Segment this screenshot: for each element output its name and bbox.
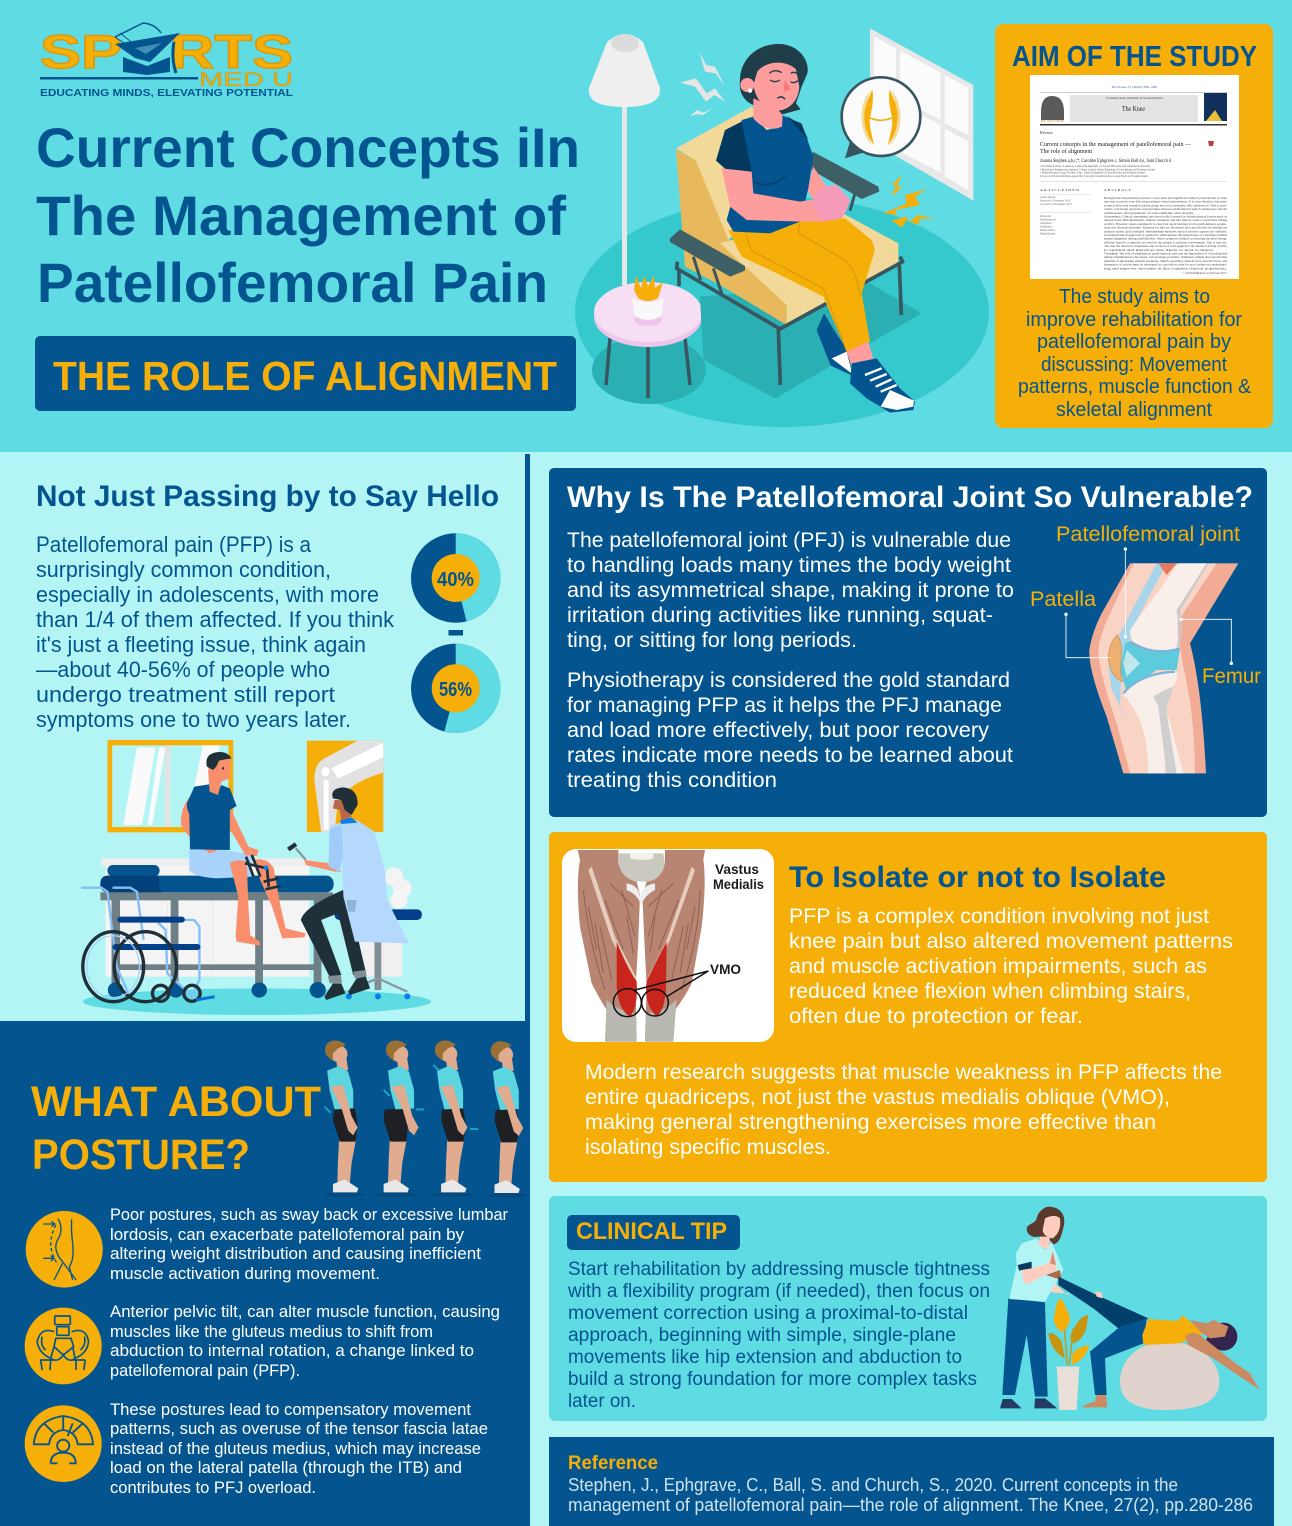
labels: Medialis bbox=[713, 876, 764, 892]
panel: what about posture bbox=[0, 1021, 530, 1526]
paragraph bbox=[36, 532, 395, 732]
paragraph: complex condition: knee pain but also altered movement patterns bbox=[789, 930, 1233, 953]
paper thumbnail: The Knee bbox=[1122, 105, 1145, 113]
paper thumbnail: altered lower limb kinematics, muscle weakness and late muscle onset or activation during bbox=[1104, 218, 1228, 222]
labels: Patella bbox=[1030, 588, 1096, 611]
panel: why is the joint so vulnerable bbox=[549, 468, 1267, 817]
text: compensatory patterns: patterns, such as overuse of the tensor fascia latae bbox=[110, 1420, 488, 1438]
panel: to isolate or not to isolate bbox=[549, 832, 1267, 1182]
chart: 56% donut bbox=[411, 644, 501, 733]
paragraph: Start rehabilitation by addressing muscle tightness bbox=[568, 1259, 990, 1280]
paragraph: build a strong foundation for more complex tasks bbox=[568, 1369, 977, 1390]
paper thumbnail: Accepted 13 November 2019 bbox=[1040, 203, 1072, 206]
paragraph: movements like hip extension and abduction to bbox=[568, 1347, 962, 1368]
paragraph: modern research: Modern research suggests that muscle weakness in PFP affects the bbox=[585, 1061, 1222, 1084]
paragraph: physiotherapy: treating this condition bbox=[567, 769, 777, 792]
paper thumbnail: activity. However when examined it is clear that study findings from patellofemoral popula- bbox=[1104, 222, 1227, 226]
paper thumbnail: Joanna Stephen a,b,c,*, Caroline Ephgrave c, Simon Ball d,e, Sam Church d bbox=[1040, 158, 1171, 164]
icon: knee joint speech bubble bbox=[842, 77, 920, 158]
title: The Management of bbox=[36, 184, 566, 247]
logo: Sports Med U: EDUCATING MINDS, ELEVATING POTENTIAL bbox=[40, 88, 293, 99]
paper thumbnail: Review bbox=[1040, 130, 1054, 135]
paragraph: complex condition: reduced knee flexion when climbing stairs, bbox=[789, 980, 1191, 1003]
paragraph: physiotherapy: Physiotherapy is considered the gold standard bbox=[567, 669, 1010, 692]
paper thumbnail: patient alignment during rehabilitation, where optimal is defined as ensuring the most energy bbox=[1104, 237, 1228, 241]
doctor bbox=[287, 787, 409, 1000]
illustration: four standing postures bbox=[324, 1041, 527, 1198]
paper thumbnail: © 2019 Published by Elsevier B.V. bbox=[1182, 271, 1228, 275]
label badge: CLINICAL TIP bbox=[576, 1218, 727, 1245]
paragraph: vulnerability: ting, or sitting for long periods. bbox=[567, 629, 857, 652]
heading: WHAT ABOUT bbox=[31, 1078, 321, 1126]
icon: floor lamp bbox=[589, 34, 660, 285]
text: anterior pelvic tilt: abduction to internal rotation, a change linked to bbox=[110, 1342, 474, 1360]
text: compensatory patterns bbox=[110, 1401, 488, 1497]
text: sway back: Poor postures, such as sway back or excessive lumbar bbox=[110, 1206, 509, 1224]
chair shadow bbox=[700, 283, 922, 398]
paper thumbnail: A biomechanical approach is applied to demonstrate the importance of ensuring optimal bbox=[1104, 233, 1227, 237]
aim text: patterns, muscle function & bbox=[1018, 376, 1252, 398]
paper thumbnail: ofar that the direction, magnitude and location of load applied to the skeleton during activity bbox=[1104, 244, 1228, 248]
heading bbox=[31, 1078, 321, 1179]
illustration: doctor examining patient's knee bbox=[81, 740, 431, 1015]
paper thumbnail: A B S T R A C T bbox=[1104, 188, 1131, 192]
illustration: therapist stretching patient on a ball bbox=[1000, 1207, 1262, 1410]
paragraph: modern research bbox=[585, 1061, 1222, 1159]
logo: Sports Med U: MED U bbox=[199, 70, 293, 91]
paragraph: physiotherapy: and load more effectively, but poor recovery bbox=[567, 719, 990, 742]
paragraph: physiotherapy bbox=[567, 669, 1013, 792]
patient bbox=[181, 752, 306, 946]
paragraph: modern research: entire quadriceps, not just the vastus medialis oblique (VMO), bbox=[585, 1086, 1170, 1109]
text: sway back: lordosis, can exacerbate patellofemoral pain by bbox=[110, 1226, 465, 1244]
heading: AIM OF THE STUDY bbox=[1012, 41, 1257, 73]
paper thumbnail: reported to persist even following evidence based interventions. It is clear therefore that there bbox=[1104, 200, 1228, 204]
paper thumbnail: kinematics of activity must be developed as a priority in order for us to further our understand- bbox=[1104, 263, 1227, 267]
paper thumbnail: efficient muscle or muscles are used by the patient to perform a movement. This is true ins- bbox=[1104, 240, 1227, 244]
paper thumbnail bbox=[1030, 75, 1239, 279]
text: anterior pelvic tilt: patellofemoral pain (PFP). bbox=[110, 1362, 300, 1380]
paragraph: vulnerability: and its asymmetrical shape, making it prone to bbox=[567, 579, 1014, 602]
heading: POSTURE? bbox=[32, 1131, 250, 1179]
subtitle banner: THE ROLE OF ALIGNMENT bbox=[53, 353, 557, 399]
text: compensatory patterns: contributes to PFJ overload. bbox=[110, 1479, 316, 1497]
illustration: woman with knee pain sitting in a chair bbox=[575, 28, 989, 427]
paper thumbnail: during rehabilitation is discussed, and strategies provided. Validated, reliable and reproducible bbox=[1104, 255, 1228, 259]
diagram: thigh muscles with VMO bbox=[562, 849, 774, 1042]
paper thumbnail: methods of measuring skeletal geometry, muscle geometry, muscle force and direction, and bbox=[1104, 259, 1228, 263]
labels bbox=[1030, 523, 1261, 688]
icon: gauge and person bbox=[25, 1405, 102, 1482]
text: sway back: muscle activation during movement. bbox=[110, 1265, 380, 1283]
aim text: improve rehabilitation for bbox=[1026, 309, 1242, 331]
paper thumbnail: subsequent development of osteoarthritis and obesity. bbox=[1104, 211, 1194, 215]
paragraph: surprisingly common condition, bbox=[36, 557, 331, 582]
aim text: patellofemoral pain by bbox=[1037, 331, 1231, 353]
paper thumbnail: Article history: bbox=[1040, 196, 1057, 199]
paper thumbnail: ELSEVIER bbox=[1041, 119, 1065, 123]
aim text: skeletal alignment bbox=[1056, 399, 1212, 421]
subtitle banner bbox=[35, 336, 576, 411]
paper thumbnail: Alignment bbox=[1040, 222, 1052, 225]
paper thumbnail: a Fortius Clinic, London, United Kingdom of Great Britain and Northern Ireland bbox=[1040, 165, 1151, 168]
paragraph: vulnerability: to handling loads many times the body weight bbox=[567, 554, 1011, 577]
diagram: knee anatomy bbox=[1030, 523, 1261, 773]
paragraph: complex condition: and muscle activation impairments, such as bbox=[789, 955, 1207, 978]
paragraph: complex condition: PFP is a complex condition involving not just bbox=[789, 905, 1209, 928]
panel: clinical tip bbox=[549, 1196, 1267, 1421]
icon: spine posture bbox=[26, 1211, 103, 1288]
paragraph: complex condition: often due to protection or fear. bbox=[789, 1005, 1083, 1028]
paper thumbnail: Received 4 November 2019 bbox=[1040, 200, 1071, 202]
paragraph: modern research: isolating specific muscles. bbox=[585, 1136, 831, 1159]
text: compensatory patterns: instead of the gluteus medius, which may increase bbox=[110, 1440, 481, 1458]
paragraph: later on. bbox=[568, 1391, 636, 1412]
paragraph: especially in adolescents, with more bbox=[36, 582, 379, 607]
paragraph bbox=[567, 1259, 990, 1412]
icon: pain bolts bbox=[680, 52, 935, 227]
labels: Femur bbox=[1202, 665, 1261, 688]
aim text: The study aims to bbox=[1059, 286, 1210, 308]
paragraph: —about 40-56% of people who bbox=[36, 657, 330, 682]
paper thumbnail: d Sports and Exercise Medicine, Queen Mary University, United Kingdom of Great Britain and Northern Ireland bbox=[1040, 175, 1149, 178]
paper thumbnail: Keywords bbox=[1040, 215, 1051, 218]
paper thumbnail: Biomechanics bbox=[1040, 229, 1055, 232]
paper thumbnail: cularly concerning, given the reported links between patellofemoral pain in adolescence and the bbox=[1104, 207, 1228, 211]
paragraph: movement correction using a proximal-to-distal bbox=[568, 1303, 968, 1324]
paragraph: approach, beginning with simple, single-plane bbox=[568, 1325, 956, 1346]
paper thumbnail: The role of alignment bbox=[1040, 148, 1092, 155]
paper thumbnail: b Mechanical Engineering, Imperial College London, United Kingdom of Great Britain and Northern Ireland bbox=[1040, 168, 1156, 172]
aim text bbox=[1018, 286, 1252, 421]
labels bbox=[710, 861, 764, 977]
heading: To Isolate or not to Isolate bbox=[789, 861, 1166, 894]
icon: pelvis bbox=[25, 1308, 102, 1384]
aim text: discussing: Movement bbox=[1041, 354, 1227, 376]
logo: Sports Med U bbox=[40, 23, 293, 99]
woman bbox=[716, 44, 915, 413]
paper thumbnail: c Physiotherapy Group, Fortius Clinic, United Kingdom of Great Britain and Northern Ireland bbox=[1040, 172, 1146, 174]
wheelchair bbox=[81, 888, 215, 1002]
paragraph: vulnerability: The patellofemoral joint (PFJ) is vulnerable due bbox=[567, 529, 1011, 552]
labels: Vastus bbox=[715, 861, 759, 877]
citation: management of patellofemoral pain—the role of alignment. The Knee, 27(2), pp.280-286 bbox=[568, 1495, 1253, 1515]
heading: Not Just Passing by to Say Hello bbox=[36, 480, 499, 513]
text: sway back bbox=[110, 1206, 509, 1283]
paper thumbnail: is optimal and therefore less likely to lead to injury. bbox=[1104, 248, 1214, 252]
paragraph: complex condition bbox=[789, 905, 1233, 1028]
paragraph: vulnerability bbox=[567, 529, 1014, 652]
title: Current Concepts iIn bbox=[36, 116, 580, 179]
paper thumbnail: is much about this complex patient group that is not presently fully understood. This is parti- bbox=[1104, 203, 1227, 207]
paper thumbnail: The Knee 27 (2020) 280–286 bbox=[1111, 85, 1157, 89]
label badge bbox=[567, 1215, 740, 1250]
chart: 56% donut: 56% bbox=[439, 679, 472, 701]
paragraph: vulnerability: irritation during activities like running, squat- bbox=[567, 604, 993, 627]
panel: not just passing by to say hello bbox=[0, 454, 525, 1021]
paper thumbnail: around current 'gold standard' measurement methods such as motion capture are outlined. bbox=[1104, 229, 1227, 233]
paper thumbnail: Patellofemoral bbox=[1040, 218, 1056, 222]
labels: Patellofemoral joint bbox=[1056, 523, 1240, 546]
paragraph: undergo treatment still report bbox=[36, 682, 335, 707]
icon: side table with plant bbox=[594, 276, 702, 398]
panel: header bbox=[0, 0, 1292, 452]
paper thumbnail: Assessment: Clinical assessment has historically focussed on biomechanical factors such as bbox=[1104, 214, 1228, 218]
icon: window bbox=[870, 28, 973, 201]
text: anterior pelvic tilt: muscles like the gluteus medius to shift from bbox=[110, 1323, 433, 1341]
title bbox=[36, 116, 580, 314]
heading: Reference bbox=[568, 1453, 658, 1474]
panel: aim of the study bbox=[995, 24, 1273, 428]
text: compensatory patterns: These postures lead to compensatory movement bbox=[110, 1401, 471, 1419]
text: sway back: altering weight distribution and causing inefficient bbox=[110, 1245, 481, 1263]
text: compensatory patterns: load on the lateral patella (through the ITB) and bbox=[110, 1459, 462, 1477]
paragraph: with a flexibility program (if needed), then focus on bbox=[567, 1281, 990, 1302]
paragraph: Patellofemoral pain (PFP) is a bbox=[36, 532, 312, 557]
citation: Stephen, J., Ephgrave, C., Ball, S. and Church, S., 2020. Current concepts in the bbox=[568, 1475, 1178, 1495]
logo: Sports Med U: SP ORTS bbox=[40, 25, 293, 78]
divider bar bbox=[525, 454, 530, 1526]
paper thumbnail: Rehabilitation bbox=[1040, 232, 1056, 236]
paper thumbnail: Treatment: The role of alignment in patellofemoral pain and the importance of correcting this bbox=[1104, 252, 1228, 256]
paragraph: than 1/4 of them affected. If you think bbox=[36, 607, 395, 632]
paper thumbnail: tions are often inconsistent. Reasons for this are discussed and specifically the limitations bbox=[1104, 226, 1228, 230]
paper thumbnail: ing and improve outcomes in this complex clinical population. bbox=[1104, 266, 1227, 270]
chart: 40% donut bbox=[411, 533, 500, 623]
heading: Why Is The Patellofemoral Joint So Vulnerable? bbox=[567, 481, 1253, 514]
paragraph: symptoms one to two years later. bbox=[36, 707, 351, 732]
paper thumbnail: Background: Patellofemoral pain is a prevalent and significant clinical problem that is often bbox=[1104, 196, 1228, 200]
paragraph: modern research: making general strengthening exercises more effective than bbox=[585, 1111, 1156, 1134]
paragraph: it's just a fleeting issue, think again bbox=[36, 632, 366, 657]
paragraph: physiotherapy: for managing PFP as it helps the PFJ manage bbox=[567, 694, 1002, 717]
chart: 40% donut: 40% bbox=[437, 569, 474, 591]
text: anterior pelvic tilt bbox=[110, 1303, 500, 1380]
paragraph: physiotherapy: rates indicate more needs to be learned about bbox=[567, 744, 1013, 767]
citation bbox=[568, 1475, 1253, 1515]
paper thumbnail: Contents lists available at ScienceDirect bbox=[1106, 96, 1163, 100]
paper thumbnail: Current concepts in the management of patellofemoral pain — bbox=[1040, 141, 1191, 148]
paper thumbnail: A R T I C L E I N F O bbox=[1040, 188, 1080, 192]
paper thumbnail: Kinematics bbox=[1040, 226, 1052, 228]
panel: reference bbox=[549, 1437, 1274, 1526]
text: anterior pelvic tilt: Anterior pelvic tilt, can alter muscle function, causing bbox=[110, 1303, 500, 1321]
chair bbox=[670, 107, 903, 385]
treatment table bbox=[100, 865, 334, 998]
cotton and stool bbox=[335, 867, 422, 999]
title: Patellofemoral Pain bbox=[37, 251, 548, 314]
labels: VMO bbox=[710, 961, 741, 977]
